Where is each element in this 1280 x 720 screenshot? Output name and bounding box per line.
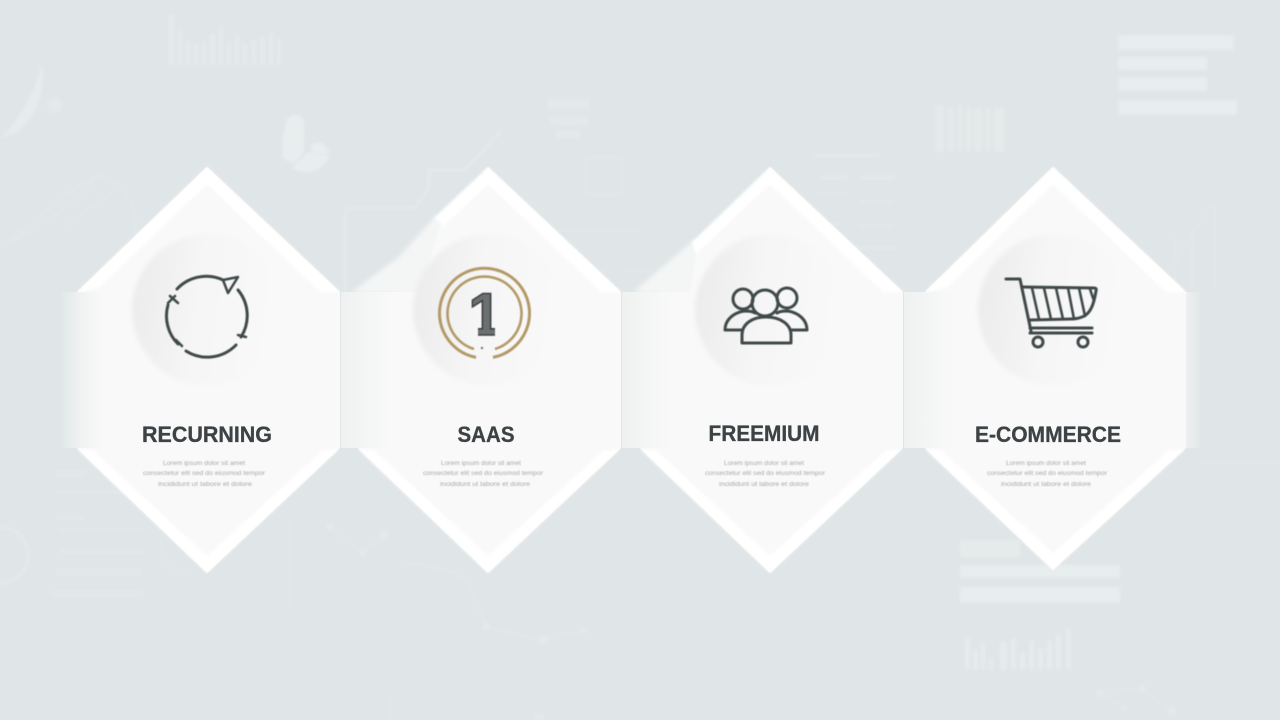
soft left fade [341, 292, 391, 448]
rising chart lines [1158, 205, 1215, 290]
description: consectetur elit sed do eiusmod tempor [143, 471, 265, 477]
icon: three people [725, 288, 807, 343]
network nodes [326, 523, 1177, 720]
arc bottom left [0, 527, 28, 583]
white lower chevron [640, 449, 902, 573]
bar chart top left [169, 14, 281, 65]
description: Lorem ipsum dolor sit amet [1006, 461, 1086, 467]
square frame [586, 157, 622, 195]
icon disc [978, 234, 1130, 386]
heading: E-COMMERCE [975, 422, 1121, 447]
loop sketch [0, 175, 136, 250]
description: incididunt ut labore et dolore [158, 482, 253, 488]
description: consectetur elit sed do eiusmod tempor [705, 471, 825, 477]
icon disc [695, 234, 847, 386]
bar chart bottom right [965, 628, 1071, 670]
description [987, 461, 1107, 488]
soft left fade [904, 292, 954, 448]
icon disc [413, 234, 565, 386]
icon: shopping cart [1006, 279, 1096, 347]
icon: recurring arrows [166, 276, 247, 357]
heading: RECURNING [142, 422, 272, 447]
small stack icon [548, 98, 590, 138]
icon: coin with number one: 1 [468, 281, 502, 348]
soft left shoulder [352, 216, 470, 296]
pie chart [282, 115, 331, 172]
white upper chevron [434, 167, 621, 292]
card: saas [341, 167, 621, 573]
text block upper middle [813, 153, 895, 250]
description: incididunt ut labore et dolore [1001, 482, 1092, 488]
white lower chevron [925, 449, 1185, 570]
heading: SAAS [458, 422, 514, 447]
description [143, 461, 265, 488]
vertical axis [290, 523, 390, 720]
white upper chevron [925, 167, 1186, 292]
card body [622, 167, 903, 573]
heading: FREEMIUM [708, 421, 820, 446]
text list top right [1118, 35, 1234, 50]
list bottom left [52, 470, 145, 598]
soft left fade [60, 292, 102, 448]
description [705, 461, 825, 488]
icon disc [132, 234, 284, 386]
icon: coin with number one [440, 268, 530, 357]
white upper chevron [77, 167, 340, 292]
swoosh top left [0, 62, 43, 138]
description: Lorem ipsum dolor sit amet [441, 461, 521, 467]
soft left fade [622, 292, 672, 448]
rule right side [560, 230, 1280, 462]
description: incididunt ut labore et dolore [440, 482, 531, 488]
soft right fade [1186, 292, 1202, 448]
description: incididunt ut labore et dolore [719, 482, 810, 488]
description: consectetur elit sed do eiusmod tempor [423, 471, 543, 477]
card: recurring [60, 167, 340, 573]
card: e-commerce [904, 167, 1202, 570]
description: consectetur elit sed do eiusmod tempor [987, 471, 1107, 477]
white upper chevron [692, 167, 903, 292]
description [423, 461, 543, 488]
network links [330, 527, 1172, 712]
description: Lorem ipsum dolor sit amet [163, 461, 245, 467]
description: Lorem ipsum dolor sit amet [724, 461, 804, 467]
soft left shoulder [634, 240, 720, 296]
text lines bottom right [960, 540, 1020, 557]
card body [341, 167, 621, 573]
barcode chart [936, 105, 1004, 152]
card body [77, 167, 340, 573]
white lower chevron [358, 449, 620, 573]
card body [904, 167, 1186, 570]
white lower chevron [77, 449, 339, 573]
card: freemium [622, 167, 903, 573]
growth line [345, 130, 502, 292]
